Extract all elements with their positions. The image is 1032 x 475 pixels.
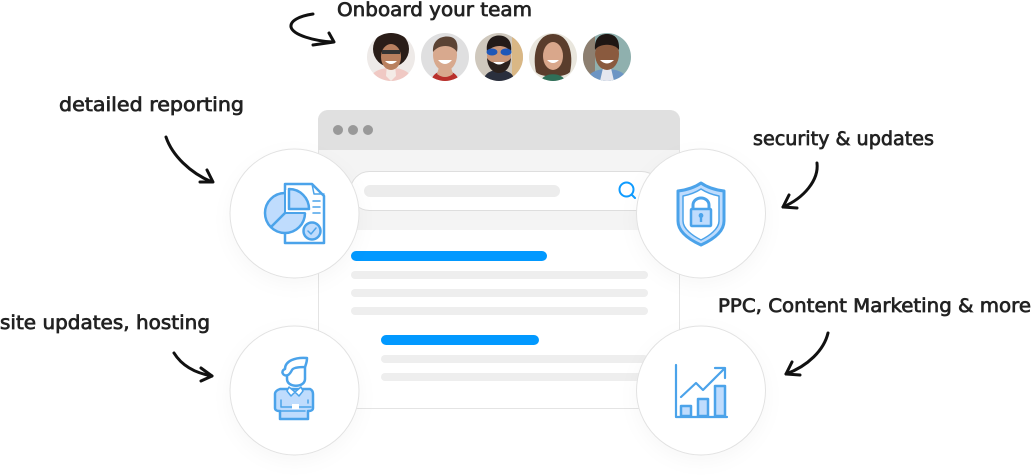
team avatars [367,31,631,81]
arrow: to security [783,163,817,208]
search bar [350,172,660,210]
arrow: to site updates [174,353,212,381]
panel: browser window [318,110,680,408]
icon: magnifier [620,182,635,198]
search band [319,150,679,230]
label: security & updates: security & updates [753,129,934,150]
avatar 4 [529,33,577,81]
avatar 1 [367,31,415,81]
circle: marketing [636,326,766,455]
label: detailed reporting: detailed reporting [59,95,244,116]
heading: onboard your team: Onboard your team [337,0,532,21]
icon: report with pie chart [265,184,324,243]
avatar 2 [421,33,469,81]
label: site updates, hosting: site updates, hosting [0,313,210,334]
circle: site updates [230,326,359,455]
icon: growth chart [676,365,727,417]
arrow: to reporting [166,137,213,182]
browser title bar [318,110,680,150]
circle: security [636,149,766,278]
result block 2 [381,335,648,381]
circle: reporting [230,149,359,278]
window control dots [333,125,373,135]
arrow: to marketing [786,333,828,375]
avatar 3 [475,33,523,81]
arrow: to team avatars [291,14,334,45]
avatar 5 [583,33,631,81]
label: PPC, Content Marketing & more: PPC, Content Marketing & more [718,296,1031,317]
icon: shield with padlock [678,183,724,245]
icon: person with crossed arms [275,358,313,419]
result block 1 [351,251,648,315]
